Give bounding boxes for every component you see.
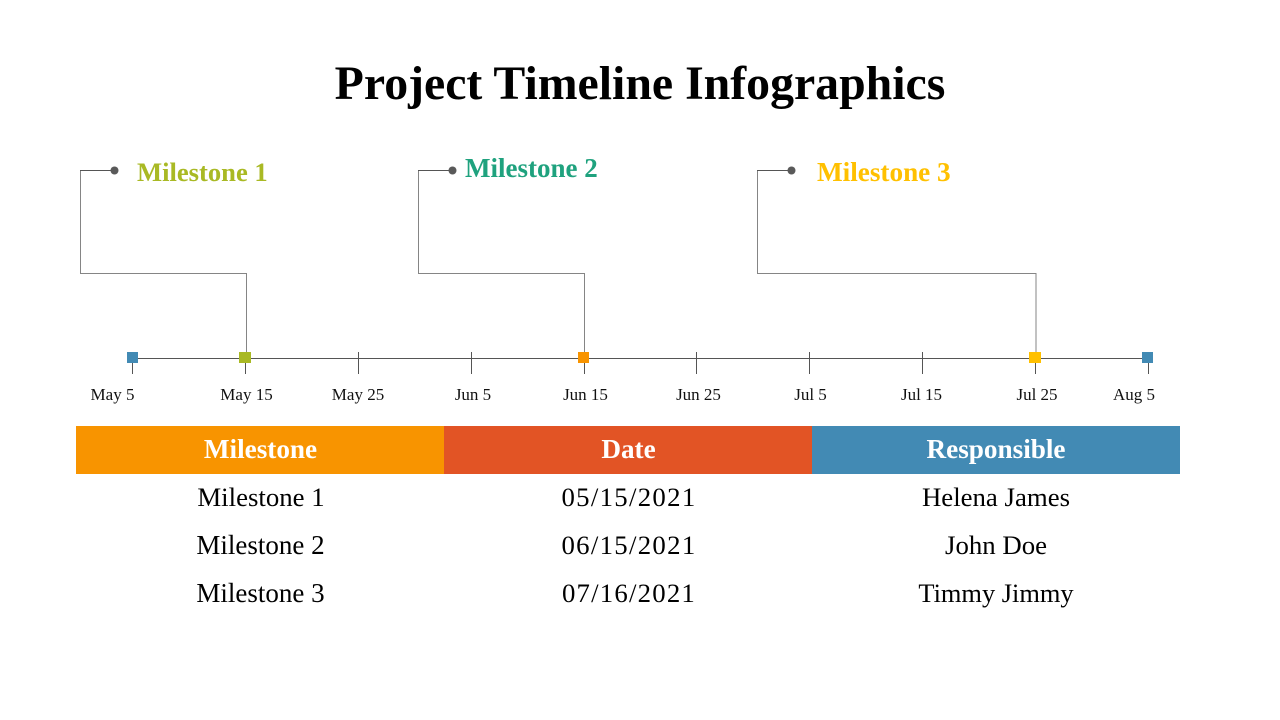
- date labels: Jul 15: [901, 385, 942, 404]
- table row 3: [196, 578, 1074, 608]
- date labels: May 5: [91, 385, 134, 404]
- connector: milestone 2: [418, 166, 584, 352]
- date labels: Jun 15: [563, 385, 608, 404]
- table header: Date: [601, 434, 656, 464]
- milestone label 2: Milestone 2: [465, 153, 598, 183]
- table row 2: John Doe: [945, 530, 1047, 560]
- date labels: Aug 5: [1113, 385, 1155, 404]
- axis line: [132, 358, 1148, 360]
- tick marks: [132, 352, 1148, 374]
- date labels: Jul 5: [794, 385, 827, 404]
- table row 3: Timmy Jimmy: [918, 578, 1074, 608]
- connector: milestone 3: [757, 166, 1036, 352]
- table row 2: 06/15/2021: [561, 530, 697, 560]
- milestone label 3: Milestone 3: [817, 157, 951, 187]
- table row 1: Milestone 1: [197, 482, 325, 512]
- date labels: May 15: [220, 385, 273, 404]
- table row 1: Helena James: [922, 482, 1070, 512]
- table row 2: [196, 530, 1047, 560]
- date labels: Jul 25: [1016, 385, 1058, 404]
- date labels: Jun 5: [455, 385, 491, 404]
- table row 1: 05/15/2021: [561, 482, 697, 512]
- table: [76, 426, 1180, 608]
- connector: milestone 1: [80, 166, 246, 352]
- table row 2: Milestone 2: [196, 530, 325, 560]
- title: Project Timeline Infographics: [335, 57, 945, 110]
- timeline markers: [127, 352, 1153, 363]
- date labels: [91, 385, 1155, 404]
- date labels: May 25: [332, 385, 384, 404]
- milestone label 1: Milestone 1: [137, 157, 268, 187]
- table header: Responsible: [926, 434, 1066, 464]
- table header: [76, 426, 1180, 474]
- table row 1: [197, 482, 1070, 512]
- table header: Milestone: [204, 434, 317, 464]
- date labels: Jun 25: [676, 385, 721, 404]
- table row 3: 07/16/2021: [562, 578, 696, 608]
- table row 3: Milestone 3: [196, 578, 325, 608]
